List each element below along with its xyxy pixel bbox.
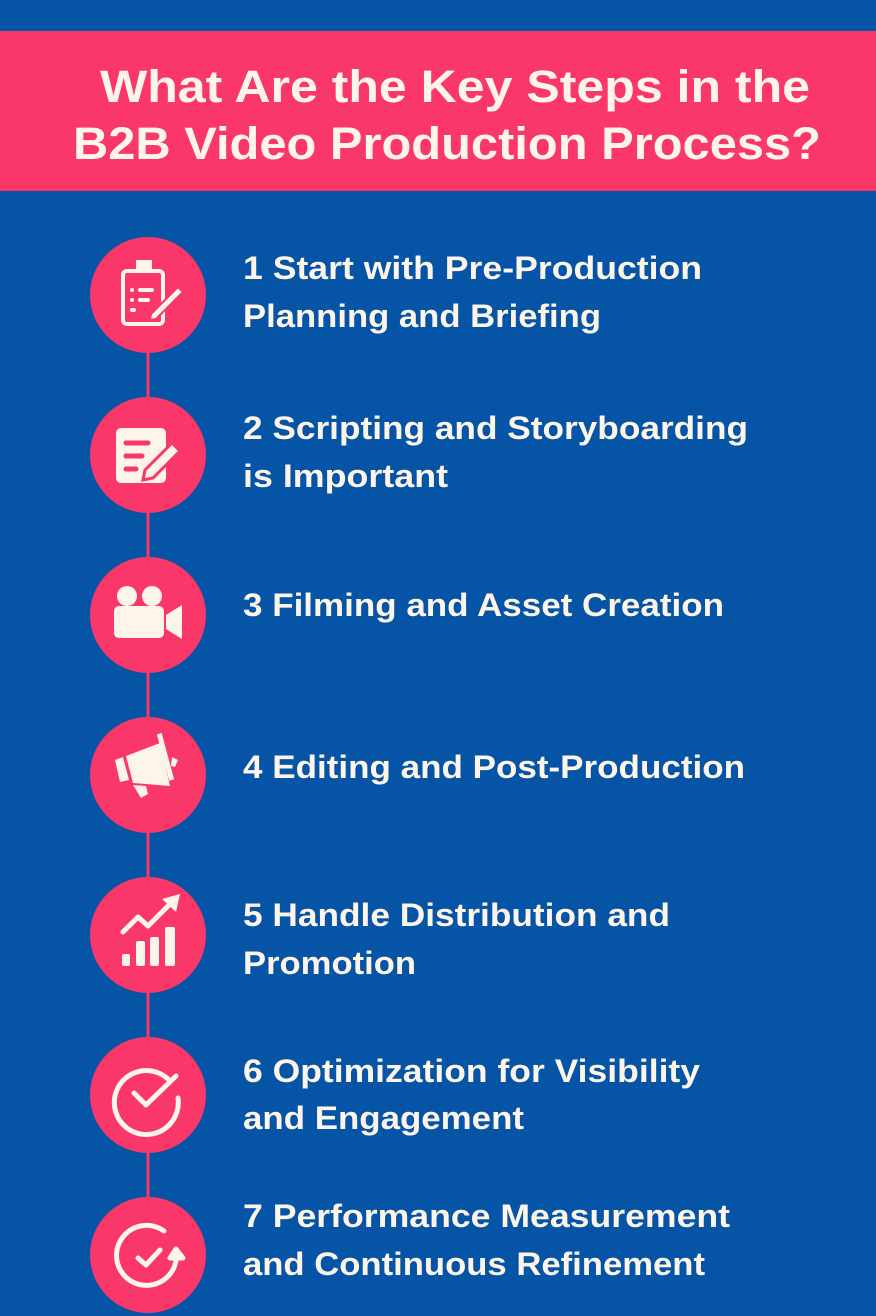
step 7 [90, 1197, 730, 1313]
step 6 [90, 1037, 700, 1153]
icon: document edit [116, 428, 180, 483]
timeline connector [146, 300, 150, 1260]
title: What Are the Key Steps in the [100, 61, 810, 112]
step 7: and Continuous Refinement [243, 1246, 705, 1282]
step 5: 5 Handle Distribution and [243, 897, 670, 933]
step 7: 7 Performance Measurement [243, 1198, 730, 1234]
step 6: 6 Optimization for Visibility [243, 1053, 700, 1089]
step 4 [90, 717, 745, 833]
step 4: 4 Editing and Post-Production [243, 749, 745, 785]
step 1: 1 Start with Pre-Production [243, 250, 702, 286]
step 1: Planning and Briefing [243, 298, 601, 334]
title banner [0, 31, 876, 191]
icon: video camera [114, 586, 182, 639]
icon: clipboard [123, 262, 183, 324]
icon: refresh check [117, 1225, 183, 1285]
step 5 [90, 877, 670, 993]
step 3: 3 Filming and Asset Creation [243, 587, 724, 623]
icon: check circle [114, 1071, 178, 1135]
title line 2: B2B Video Production Process? [73, 118, 821, 169]
icon: growth chart [122, 894, 180, 966]
step 2: 2 Scripting and Storyboarding [243, 410, 748, 446]
step 1 [90, 237, 702, 353]
step 3 [90, 557, 724, 673]
step 2: is Important [243, 458, 448, 494]
step 6: and Engagement [243, 1100, 524, 1136]
step 2 [90, 397, 748, 513]
step 5: Promotion [243, 945, 416, 981]
icon: megaphone [115, 733, 178, 798]
